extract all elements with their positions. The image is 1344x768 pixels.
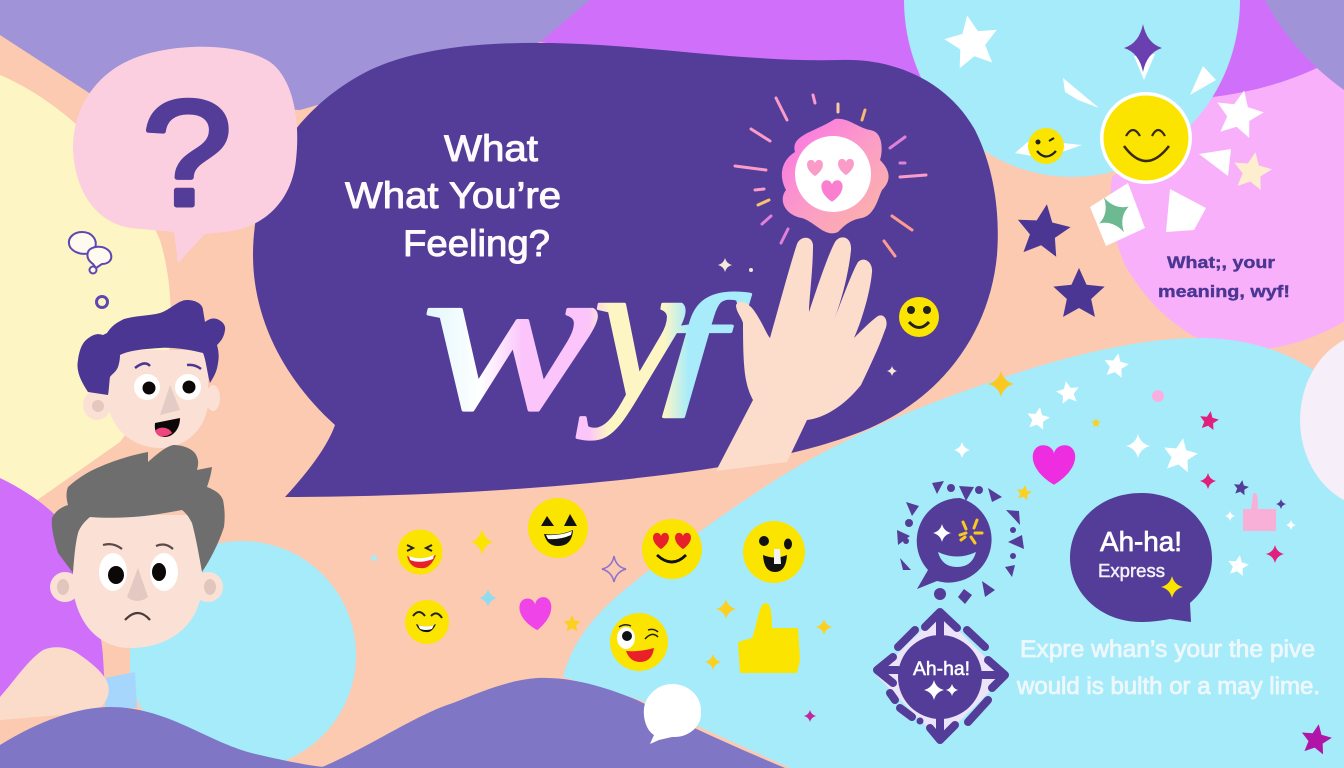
icon: smiling emoji (405, 600, 449, 644)
icon: thought bubble (69, 232, 111, 308)
icon: white chat bubble (644, 684, 701, 744)
background: violet top band (540, 0, 1344, 115)
illustration: worried grey haired person (50, 445, 225, 708)
background: purple wave left (0, 707, 340, 768)
background: lavender top right corner (1265, 0, 1344, 90)
background: pale white right ellipse (1300, 332, 1344, 508)
heading: What You're Feeling?: What You’re (345, 175, 561, 216)
text: what your meaning: What;, your (1167, 253, 1275, 272)
icon: laughing emoji (398, 530, 442, 574)
illustration: raised hand (716, 237, 887, 471)
heading: What You're Feeling? (345, 128, 561, 264)
decoration: burst fragments (897, 481, 1024, 604)
text: caption: Expre whan’s your the pive (1020, 636, 1315, 663)
icon: purple stars (1014, 201, 1105, 317)
text: what your meaning: meaning, wyf! (1158, 282, 1290, 301)
background: pink right circle (1111, 68, 1344, 350)
icons: stars and sparkles over cyan area (954, 351, 1334, 755)
icon: magenta heart (519, 596, 553, 632)
decoration: flower light rays (735, 95, 926, 256)
background: large cyan lower right shape (563, 338, 1344, 768)
icon: small smiley with wings (1015, 128, 1082, 164)
decoration: diamond chevrons and edge fragments (877, 612, 1005, 740)
illustration: hand on blanket (0, 647, 109, 720)
icon: sparkles beside hand (718, 258, 897, 376)
badge: Ah-ha Express speech bubble: Ah-ha! (1100, 526, 1182, 557)
background: purple wave centre (320, 678, 785, 768)
lettering: wyf: f (662, 269, 751, 418)
lettering: wyf (422, 216, 751, 455)
badge: Ah-ha diamond (876, 612, 1005, 740)
icon: thumbs up (738, 603, 800, 673)
heading: What You're Feeling?: What (444, 128, 539, 169)
icon: yellow burst (960, 520, 982, 543)
background: cyan top circle (904, 0, 1240, 177)
icon: heart eyes emoji (642, 519, 702, 579)
text: what your meaning (1158, 253, 1290, 301)
heading: What You're Feeling?: Feeling? (403, 223, 550, 264)
lettering: wyf: w (422, 216, 598, 455)
background: magenta left shape (0, 478, 110, 705)
icon: grinning emoji (528, 498, 588, 558)
panel: main speech bubble (253, 43, 998, 497)
icon: question speech bubble: ? (142, 69, 232, 237)
icon: sun smiley with rays (1063, 24, 1274, 246)
badge: Ah-ha diamond: Ah-ha! (913, 659, 970, 680)
icon: winking emoji on bubble (899, 297, 939, 337)
icon: question speech bubble (73, 47, 297, 263)
text: caption (1016, 636, 1320, 700)
badge: Ah-ha Express speech bubble: Express (1098, 560, 1165, 581)
icons: small sparkles around emojis (371, 529, 832, 722)
lettering: wyf: y (577, 219, 684, 440)
badge: smiling burst speech bubble (897, 481, 1024, 604)
icon: surprised emoji (743, 521, 805, 583)
icon: winking emoji (610, 613, 668, 671)
icon: ray sparkles and kites (1063, 54, 1274, 246)
text: caption: would is bulth or a may lime. (1016, 673, 1320, 700)
icon: white star (941, 11, 1002, 70)
badge: Ah-ha Express speech bubble (1070, 493, 1212, 622)
background: lavender top band (0, 0, 600, 110)
illustration: surprised purple haired person (77, 300, 225, 448)
background: pale yellow left shape (0, 75, 171, 503)
icon: glowing flower face (735, 95, 926, 256)
icon: pink thumbs up (1243, 493, 1276, 531)
background: cyan circle bottom left (128, 541, 356, 768)
